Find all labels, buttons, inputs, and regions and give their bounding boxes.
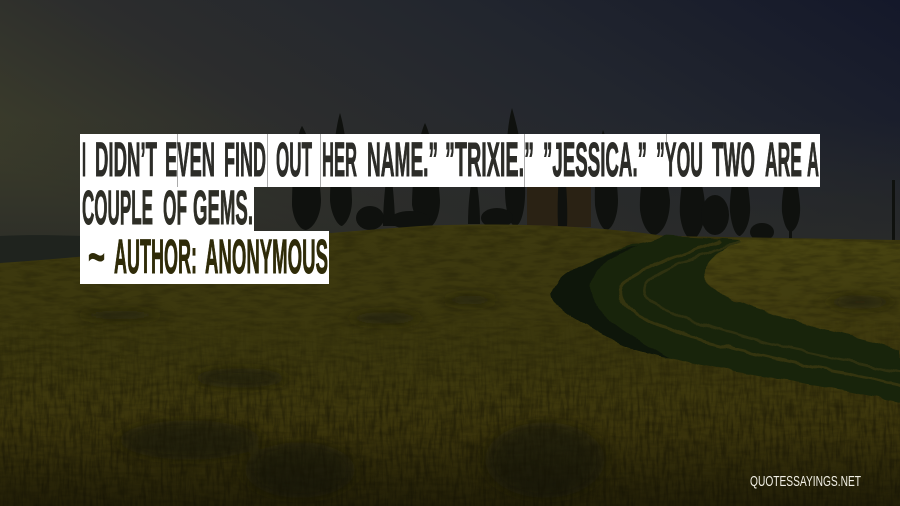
background: wheat field [0,224,900,506]
background: distant hills [0,235,260,268]
author attribution: AUTHOR: [114,230,197,284]
background: dark patches in wheat [80,295,890,498]
quote line 1: DIDN’T [95,133,157,187]
quote line 1 [80,133,820,187]
quote card: GEMS. [193,181,253,235]
farmhouse [527,187,591,227]
quote line 1: TWO [712,133,755,187]
background: tree line and farmhouse [292,108,895,244]
quote line 1: OUT [276,133,312,187]
quote line 2: COUPLE [82,181,153,235]
quote line 1: ”YOU [656,133,703,187]
quote card: ANONYMOUS [205,230,328,284]
quote line 1: NAME.” [367,133,438,187]
quote line 1: EVEN [165,133,215,187]
background: winding green track [552,236,900,402]
quote line 1: ”TRIXIE.” [445,133,534,187]
background: evening sky [0,0,900,300]
quote line 1: ”JESSICA.” [543,133,647,187]
quote line 1: HER [322,133,357,187]
background: sunlit wheat on the upper right [704,239,900,350]
background: wheat texture [0,226,900,506]
quote line 1: ARE [765,133,802,187]
quote line 1: FIND [224,133,266,187]
quote line 2: OF [163,181,187,235]
author attribution: ~ [88,230,105,284]
quote card: A [807,133,819,187]
quote line 1: I [82,133,86,187]
